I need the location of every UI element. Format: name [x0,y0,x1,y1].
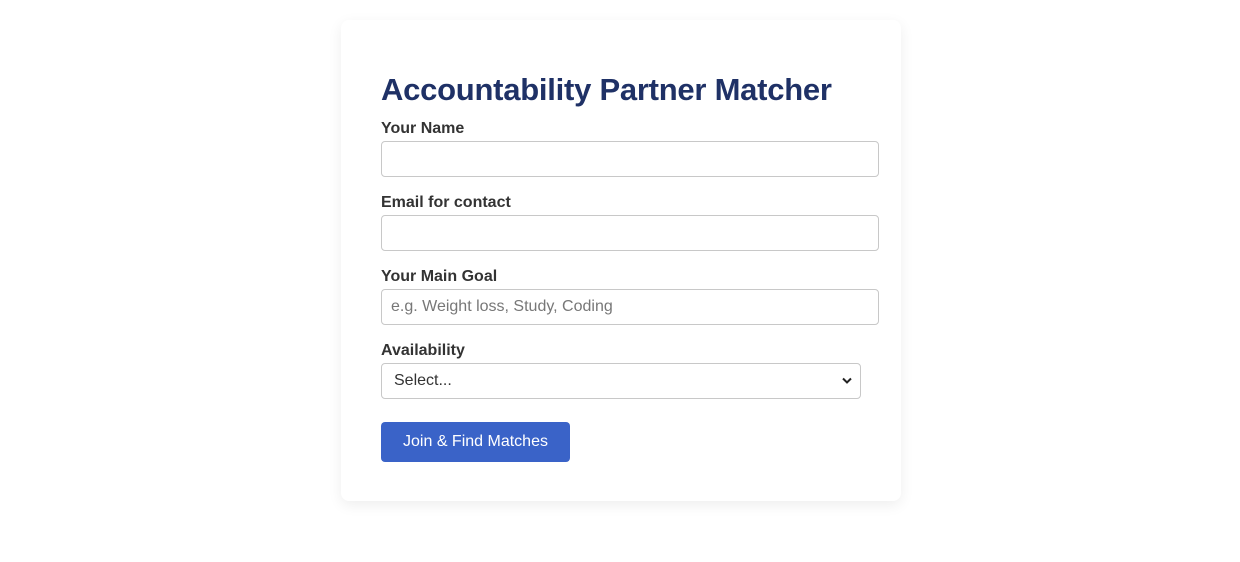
select: availability: Select... [394,372,452,389]
input: email [381,215,879,251]
panel: form card [341,20,901,501]
button: join [381,422,570,462]
label: goal: Your Main Goal [381,268,497,285]
select: availability [381,363,861,399]
label: email: Email for contact [381,194,511,211]
label: your name: Your Name [381,120,464,137]
input: goal [381,289,879,325]
label: availability: Availability [381,342,465,359]
button: join: Join & Find Matches [403,433,548,450]
input: goal: e.g. Weight loss, Study, Coding [391,298,613,315]
title: Accountability Partner Matcher [381,72,832,107]
input: name [381,141,879,177]
